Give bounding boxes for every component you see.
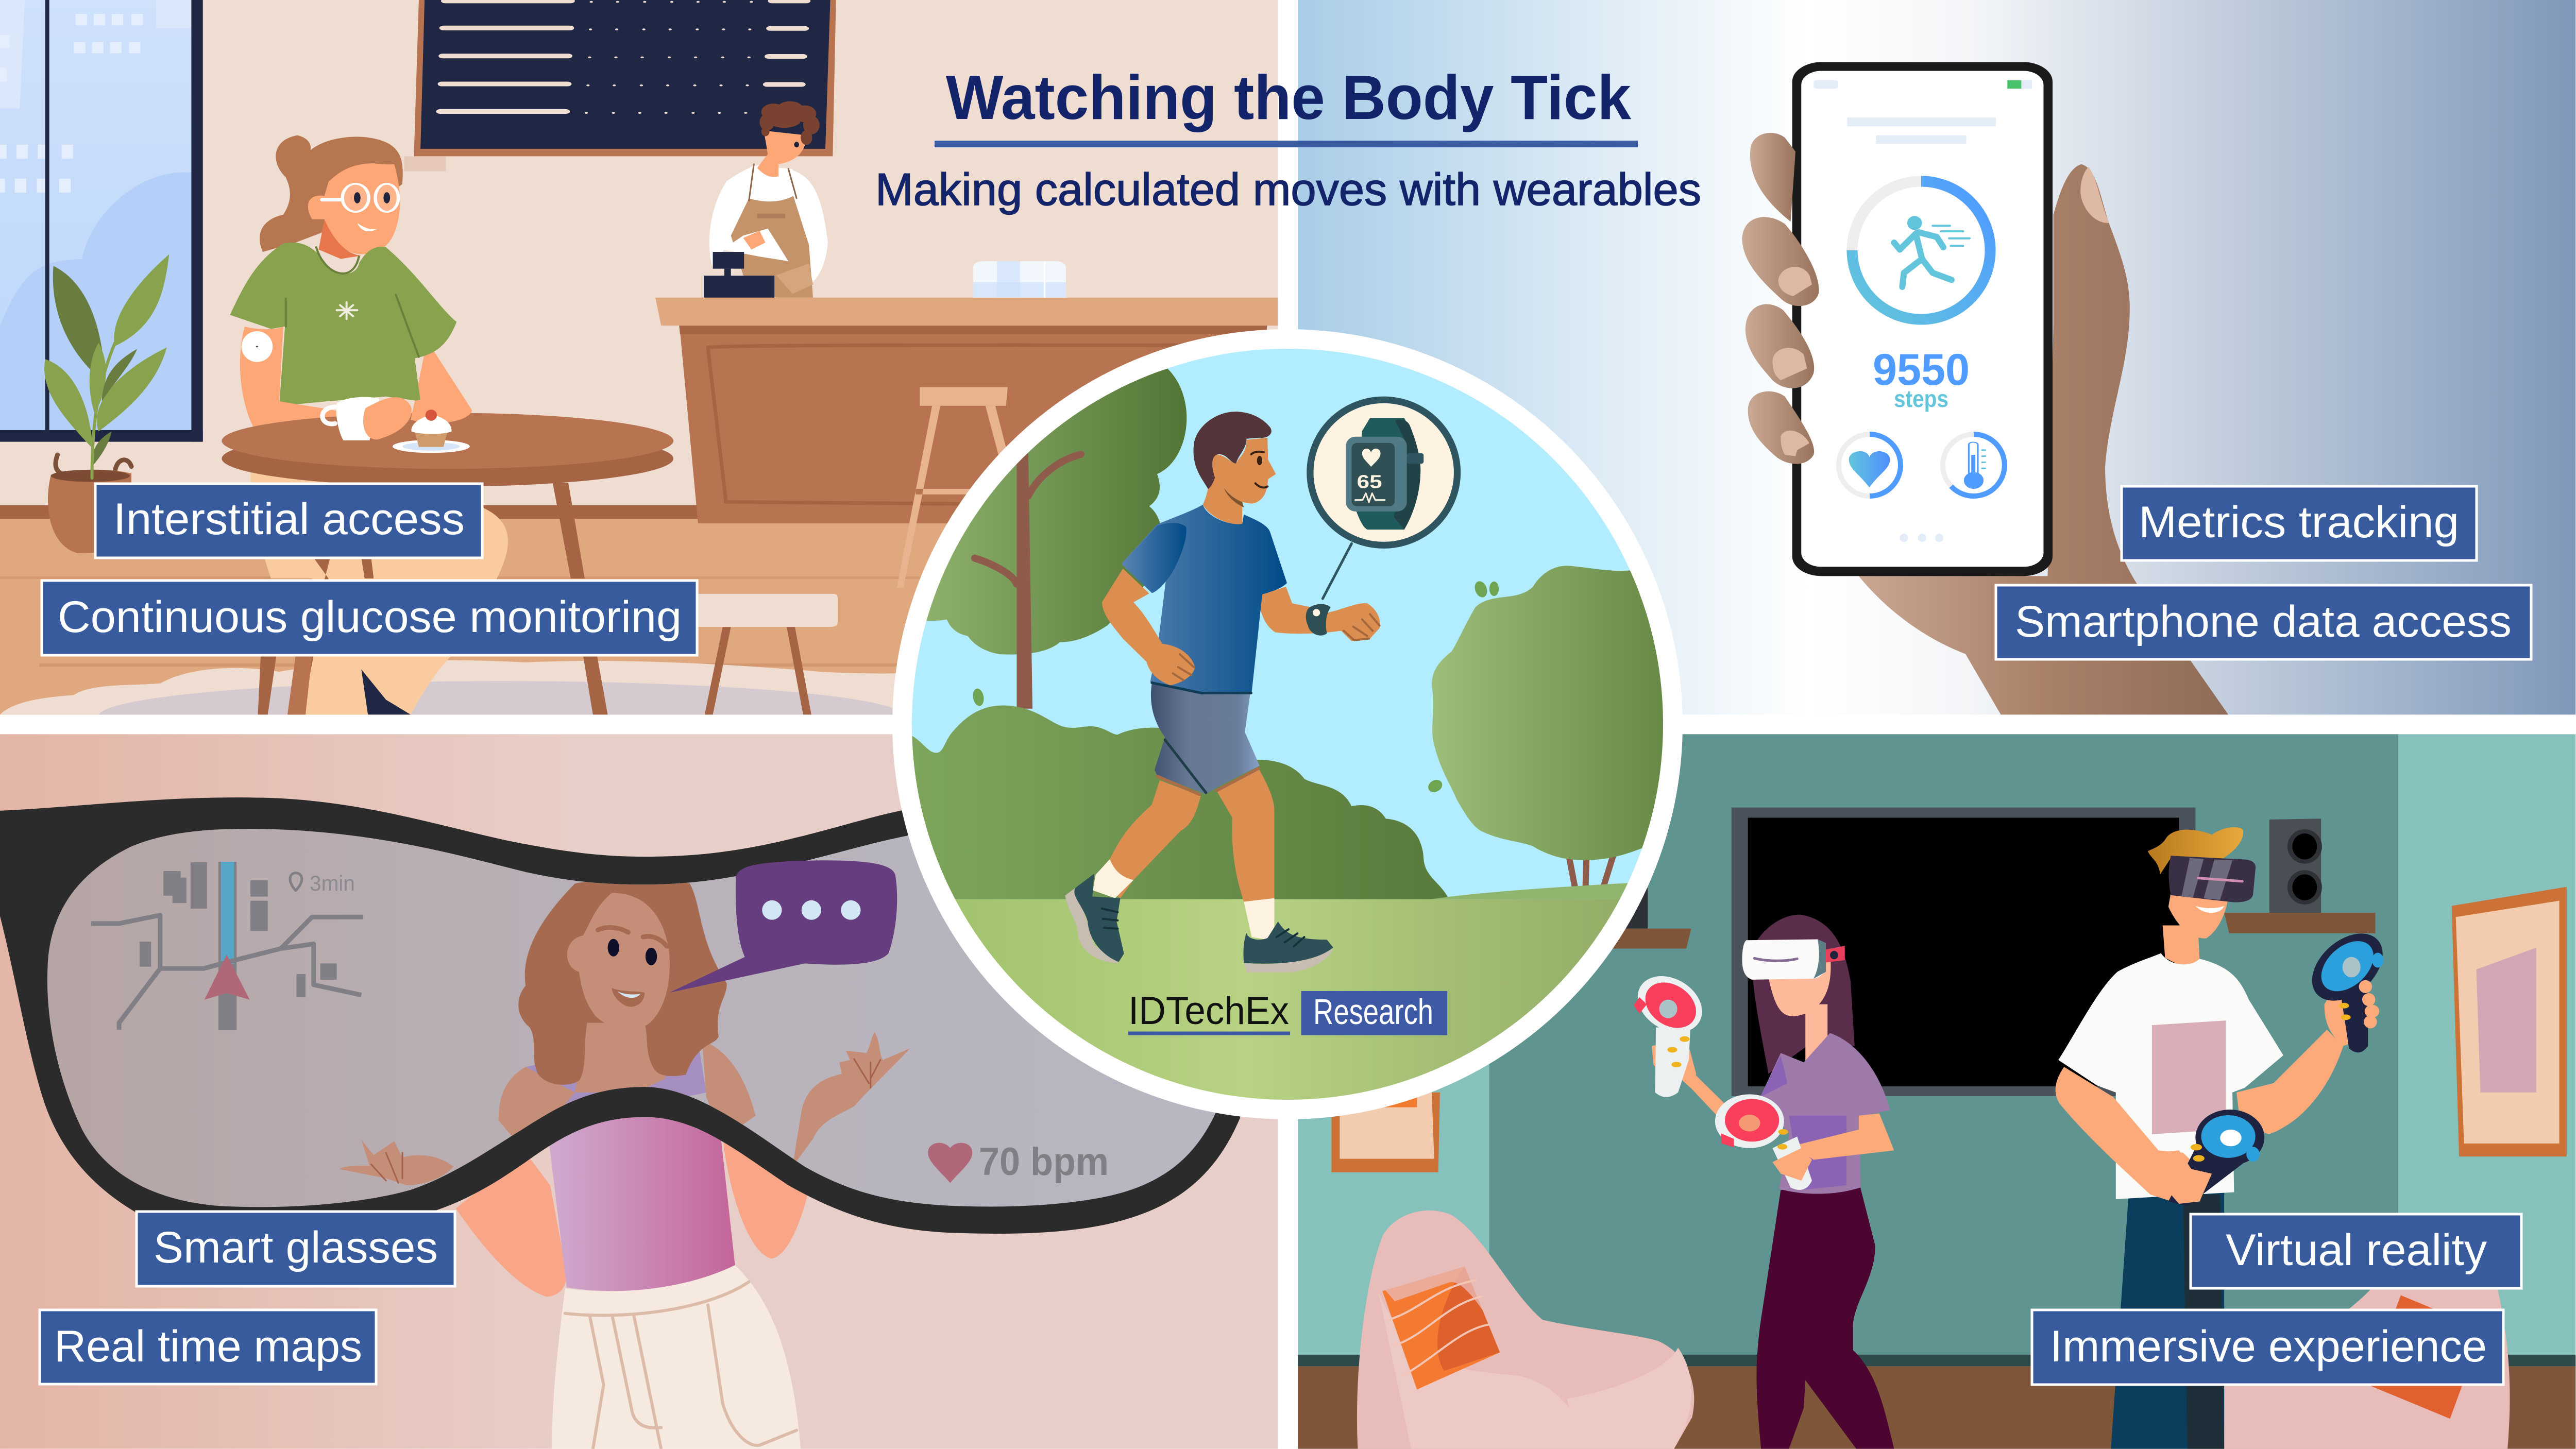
man's blue controllers (2154, 929, 2396, 1206)
plant (44, 254, 169, 553)
cupcake (393, 410, 470, 453)
panel: virtual reality scene (1298, 734, 2575, 1449)
left armchair (1357, 1211, 1694, 1449)
left tree (902, 369, 1187, 709)
woman seen through lens (339, 880, 910, 1185)
panel: smart glasses scene (0, 734, 1278, 1449)
label: smartphone data access (1996, 585, 2531, 659)
logo text: Research: Research (1313, 992, 1433, 1032)
woman's red controllers (1628, 972, 1812, 1190)
logo underline (1128, 1032, 1290, 1035)
counter (655, 298, 1278, 523)
label: immersive experience: Immersive experience (2050, 1322, 2487, 1371)
holding hand (1859, 164, 2228, 714)
thumb nail (2080, 167, 2109, 223)
label: smart glasses: Smart glasses (154, 1223, 438, 1272)
fingers (1742, 133, 1819, 464)
woman in VR headset (1686, 915, 1894, 1449)
menu board (414, 0, 836, 156)
seated woman (230, 135, 508, 714)
heart icon (1849, 451, 1890, 487)
label: metrics tracking (2122, 486, 2477, 560)
temperature ring (1943, 434, 2005, 496)
label: interstitial access: Interstitial access (113, 495, 465, 544)
right shelf and speaker (2224, 819, 2375, 933)
heart rate icon (928, 1143, 972, 1183)
label: metrics tracking: Metrics tracking (2139, 498, 2459, 547)
lens (47, 829, 1232, 1207)
step count: 9550 (1873, 345, 1970, 395)
left poster (1331, 1093, 1440, 1172)
hands and coffee cup (323, 397, 472, 440)
circle white border (902, 339, 1673, 1110)
glasses frame (0, 797, 1240, 1234)
left shelf and speaker (1600, 888, 1691, 948)
right poster (2452, 887, 2567, 1156)
window (0, 0, 203, 442)
label: real time maps: Real time maps (54, 1322, 362, 1371)
label: virtual reality (2191, 1214, 2521, 1288)
label: smart glasses (137, 1212, 455, 1286)
label: smartphone data access: Smartphone data access (2015, 597, 2512, 646)
map eta text: 3min (310, 871, 355, 895)
title: Watching the Body Tick (946, 62, 1631, 132)
bar stool (897, 387, 1008, 588)
label: continuous glucose monitoring (42, 581, 697, 655)
watch callout: 65 (1357, 471, 1382, 492)
cups (973, 261, 1066, 298)
jogger (1065, 412, 1380, 973)
heart rate text: 70 bpm (979, 1140, 1109, 1184)
thermometer icon (1964, 442, 1985, 489)
subtitle: Making calculated moves with wearables (875, 164, 1701, 215)
logo text: IDTechEx: IDTechEx (1128, 989, 1289, 1033)
ground (876, 881, 1700, 1138)
woman lower body (456, 1106, 809, 1449)
step count: steps (1894, 385, 1948, 412)
television (1732, 808, 2195, 1096)
stool (697, 594, 838, 714)
logo research box (1301, 991, 1447, 1035)
panel: cafe scene with glucose monitor (0, 0, 1278, 751)
floor (0, 505, 947, 715)
leaves (972, 579, 1499, 795)
cash register (704, 252, 774, 298)
watch callout (1310, 400, 1458, 599)
right armchair (2173, 1278, 2510, 1449)
running icon (1894, 216, 1970, 287)
phone (1792, 62, 2053, 576)
man in VR headset (2056, 827, 2343, 1449)
barista (709, 101, 828, 298)
central circle: jogger with smartwatch (876, 319, 1700, 1138)
label: interstitial access (95, 484, 482, 558)
panel: smartphone metrics scene (1298, 0, 2575, 714)
map overlay (91, 862, 363, 1030)
label: continuous glucose monitoring: Continuous glucose monitoring (58, 592, 682, 642)
right tree (1432, 566, 1675, 888)
label: real time maps (40, 1310, 376, 1384)
table (222, 413, 673, 714)
heart rate ring (1839, 434, 1901, 496)
label: immersive experience (2032, 1310, 2503, 1385)
label: virtual reality: Virtual reality (2226, 1225, 2487, 1275)
bushes (892, 706, 1449, 899)
speech bubble (669, 860, 897, 993)
step progress ring (1852, 181, 1990, 319)
